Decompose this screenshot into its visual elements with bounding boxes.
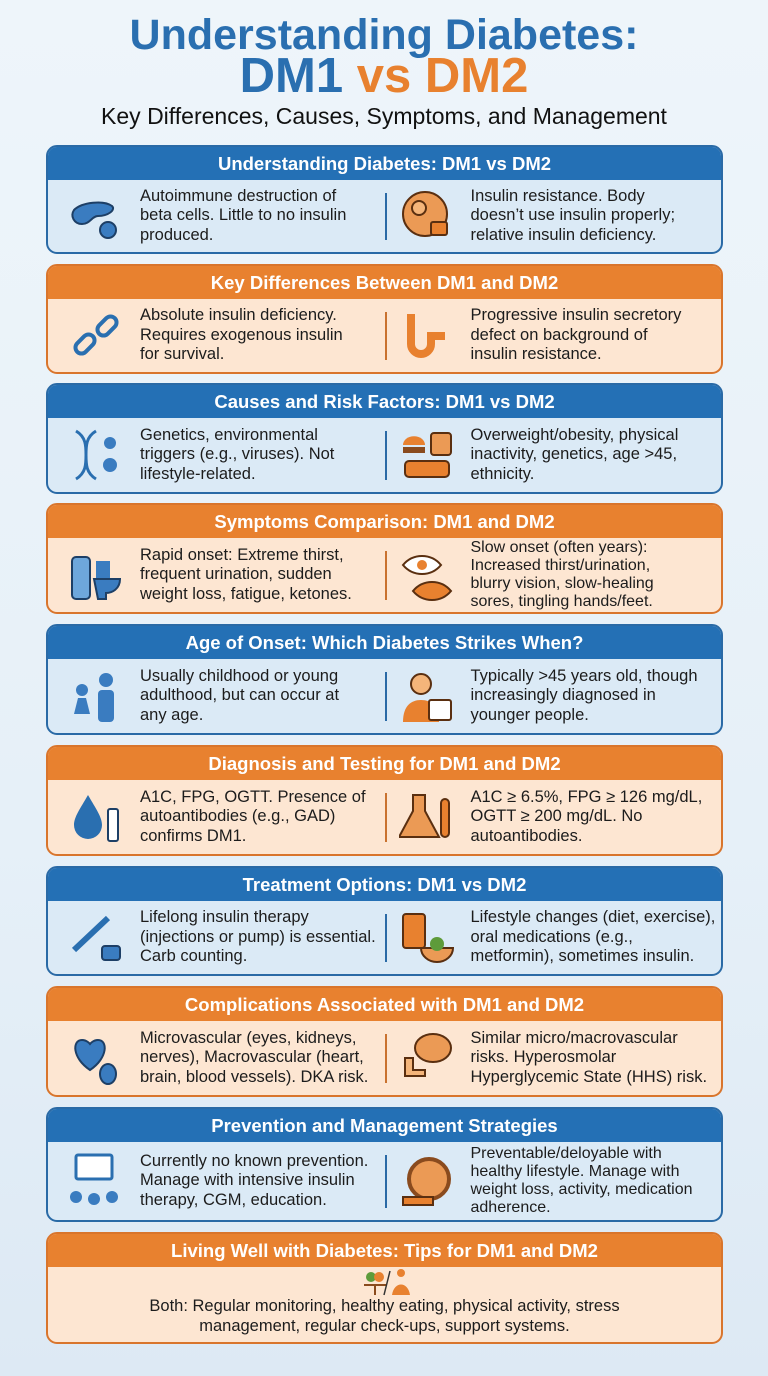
title: Understanding Diabetes: <box>130 11 638 59</box>
DM1 text <box>74 1029 368 1086</box>
DM1 text: therapy, CGM, education. <box>140 1191 327 1209</box>
DM1 text: Absolute insulin deficiency. <box>140 306 337 324</box>
panel: complications <box>46 986 723 1097</box>
DM2 text: OGTT ≥ 200 mg/dL. No <box>470 807 642 825</box>
panel: prevention: Prevention and Management Strategies <box>211 1115 558 1136</box>
DM2 text: Typically >45 years old, though <box>470 667 698 685</box>
tips text: Both: Regular monitoring, healthy eating, physical activity, stress <box>149 1297 620 1315</box>
DM1 text: Requires exogenous insulin <box>140 326 343 344</box>
panel: key differences <box>46 264 723 374</box>
DM2 text: autoantibodies. <box>470 827 582 845</box>
DM2 text <box>403 667 698 724</box>
DM2 text: metformin), sometimes insulin. <box>470 947 694 965</box>
DM2 text: Similar micro/macrovascular <box>470 1029 678 1047</box>
DM1 text: Autoimmune destruction of <box>140 187 336 205</box>
DM1 text <box>71 187 346 244</box>
panel: diagnosis: Diagnosis and Testing for DM1 and DM2 <box>208 753 561 774</box>
DM2 text <box>402 908 715 965</box>
DM1 text: any age. <box>140 706 203 724</box>
DM2 text: Slow onset (often years): <box>470 539 647 556</box>
DM2 text: A1C ≥ 6.5%, FPG ≥ 126 mg/dL, <box>470 788 702 806</box>
DM2 text: increasingly diagnosed in <box>470 686 656 704</box>
DM1 text: Rapid onset: Extreme thirst, <box>140 546 344 564</box>
panel: causes: Causes and Risk Factors: DM1 vs DM2 <box>214 391 555 412</box>
DM2 text: relative insulin deficiency. <box>470 226 656 244</box>
panel: age of onset: Age of Onset: Which Diabetes Strikes When? <box>186 632 583 653</box>
DM1 text: Microvascular (eyes, kidneys, <box>140 1029 356 1047</box>
DM1 text: frequent urination, sudden <box>140 565 332 583</box>
DM1 text: nerves), Macrovascular (heart, <box>140 1048 364 1066</box>
DM2 text <box>399 788 702 845</box>
tips text <box>149 1297 620 1335</box>
DM2 text <box>402 187 675 244</box>
DM2 text <box>407 306 682 363</box>
DM2 text: Insulin resistance. Body <box>470 187 645 205</box>
DM2 text: doesn’t use insulin properly; <box>470 206 675 224</box>
DM1 text: lifestyle-related. <box>140 465 256 483</box>
DM1 text: confirms DM1. <box>140 827 246 845</box>
DM2 text: defect on background of <box>470 326 648 344</box>
DM1 text: adulthood, but can occur at <box>140 686 339 704</box>
panel: complications: Complications Associated with DM1 and DM2 <box>185 994 584 1015</box>
DM2 text <box>402 539 654 610</box>
DM2 text: Overweight/obesity, physical <box>470 426 678 444</box>
DM1 text: A1C, FPG, OGTT. Presence of <box>140 788 366 806</box>
DM1 text: brain, blood vessels). DKA risk. <box>140 1068 368 1086</box>
icon: balance and meditation <box>364 1269 410 1296</box>
DM2 text: ethnicity. <box>470 465 534 483</box>
panel: prevention <box>46 1107 723 1222</box>
DM2 text <box>402 1145 693 1216</box>
DM2 text: weight loss, activity, medication <box>470 1181 693 1198</box>
DM1 text: Manage with intensive insulin <box>140 1171 355 1189</box>
DM1 text: autoantibodies (e.g., GAD) <box>140 807 335 825</box>
DM2 text: Hyperglycemic State (HHS) risk. <box>470 1068 707 1086</box>
DM2 text: risks. Hyperosmolar <box>470 1048 616 1066</box>
panel: diagnosis <box>46 745 723 856</box>
panel: symptoms <box>46 503 723 614</box>
panel: symptoms: Symptoms Comparison: DM1 and DM2 <box>214 511 555 532</box>
DM1 text: (injections or pump) is essential. <box>140 928 376 946</box>
DM2 text: insulin resistance. <box>470 345 602 363</box>
DM1 text <box>75 426 334 483</box>
DM2 text: sores, tingling hands/feet. <box>470 593 653 610</box>
panel: treatment: Treatment Options: DM1 vs DM2 <box>243 874 526 895</box>
DM2 text: oral medications (e.g., <box>470 928 633 946</box>
panel: causes <box>46 383 723 494</box>
DM2 text <box>404 1029 707 1086</box>
DM1 text <box>74 667 339 724</box>
DM1 text: Carb counting. <box>140 947 247 965</box>
DM2 text: younger people. <box>470 706 589 724</box>
DM1 text <box>70 1152 368 1209</box>
DM1 text: Lifelong insulin therapy <box>140 908 309 926</box>
DM2 text: Progressive insulin secretory <box>470 306 681 324</box>
DM2 text: Increased thirst/urination, <box>470 557 650 574</box>
DM1 text: triggers (e.g., viruses). Not <box>140 445 334 463</box>
DM1 text <box>74 306 343 363</box>
DM1 text <box>71 546 352 603</box>
DM2 text: adherence. <box>470 1199 551 1216</box>
DM2 text: inactivity, genetics, age >45, <box>470 445 677 463</box>
DM1 text <box>72 908 376 965</box>
DM1 text: produced. <box>140 226 213 244</box>
panel: living well: Living Well with Diabetes: Tips for DM1 and DM2 <box>171 1240 598 1261</box>
tips text: management, regular check-ups, support systems. <box>199 1317 570 1335</box>
panel: key differences: Key Differences Between DM1 and DM2 <box>211 272 558 293</box>
DM1 text <box>74 788 366 845</box>
title line 2: DM1 vs DM2 <box>240 49 528 103</box>
DM2 text: blurry vision, slow-healing <box>470 575 654 592</box>
DM1 text: Usually childhood or young <box>140 667 338 685</box>
DM1 text: beta cells. Little to no insulin <box>140 206 346 224</box>
DM1 text: Currently no known prevention. <box>140 1152 368 1170</box>
DM1 text: for survival. <box>140 345 224 363</box>
subtitle: Key Differences, Causes, Symptoms, and Management <box>101 103 667 129</box>
panel: age of onset <box>46 624 723 735</box>
panel: living well <box>46 1232 723 1344</box>
DM1 text: weight loss, fatigue, ketones. <box>140 585 352 603</box>
DM2 text: Preventable/deloyable with <box>470 1145 662 1162</box>
DM2 text: Lifestyle changes (diet, exercise), <box>470 908 715 926</box>
DM2 text: healthy lifestyle. Manage with <box>470 1163 680 1180</box>
panel: treatment <box>46 866 723 976</box>
DM1 text: Genetics, environmental <box>140 426 318 444</box>
panel: understanding <box>46 145 723 254</box>
DM2 text <box>403 426 678 483</box>
panel: understanding: Understanding Diabetes: DM1 vs DM2 <box>218 153 551 174</box>
